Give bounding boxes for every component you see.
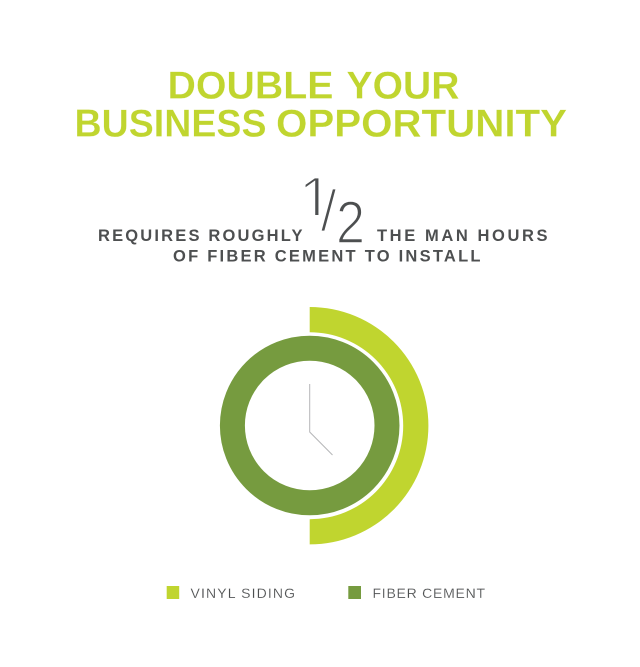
clock hands	[310, 384, 332, 455]
title: YOUR	[346, 64, 460, 107]
legend	[167, 585, 485, 601]
title: BUSINESS	[74, 103, 266, 146]
chart: clock rings	[232, 307, 428, 544]
subheading: OF FIBER CEMENT TO INSTALL	[173, 248, 480, 266]
title: DOUBLE	[168, 64, 334, 107]
fraction: one half: 2	[336, 189, 365, 256]
fraction: one half: 1	[298, 165, 333, 234]
fraction: one half	[306, 178, 362, 242]
subheading: REQUIRES ROUGHLY	[98, 227, 302, 245]
fraction: one half: /	[320, 179, 338, 244]
subheading	[99, 178, 547, 262]
legend: vinyl siding: VINYL SIDING	[190, 585, 295, 601]
subheading: THE MAN HOURS	[377, 227, 548, 245]
infographic	[77, 72, 566, 599]
legend: fiber cement: FIBER CEMENT	[372, 585, 485, 601]
title	[74, 64, 567, 146]
title: OPPORTUNITY	[276, 103, 567, 146]
fiber cement full ring	[232, 348, 387, 503]
vinyl siding half ring	[310, 307, 428, 544]
